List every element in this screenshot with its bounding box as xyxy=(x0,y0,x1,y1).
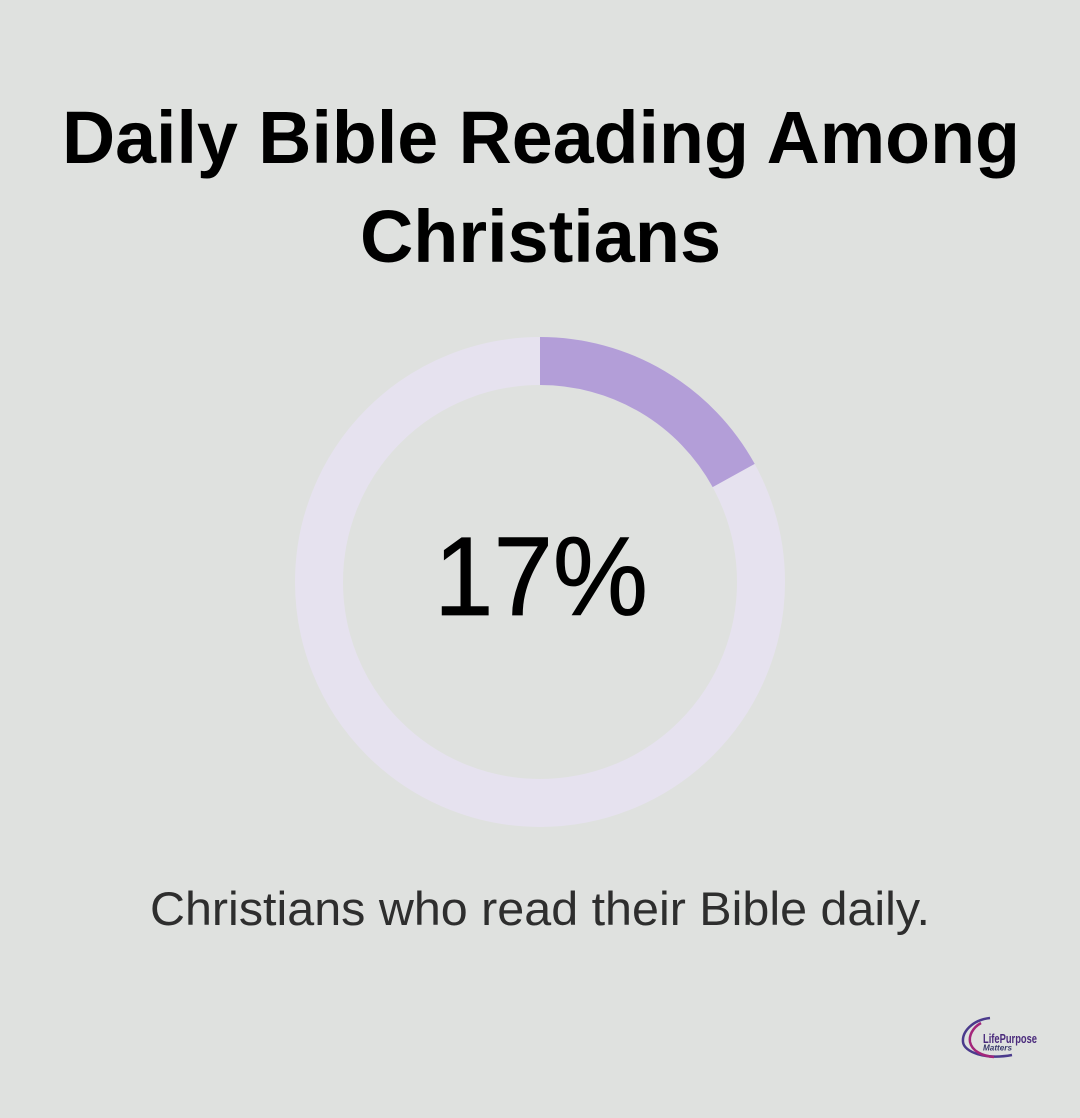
logo inner arc xyxy=(970,1023,994,1057)
donut chart: 17% xyxy=(319,361,761,803)
big percentage: 17% xyxy=(434,514,648,639)
logo wordmark: LifePurpose xyxy=(983,1031,1037,1046)
caption: Christians who read their Bible daily. xyxy=(150,882,930,935)
donut track xyxy=(319,361,761,803)
donut value arc xyxy=(540,361,734,476)
title: Daily Bible Reading Among xyxy=(62,96,1020,179)
logo: Life Purpose Matters xyxy=(963,1018,1037,1057)
title: Christians xyxy=(360,195,721,278)
logo outer arc xyxy=(963,1018,1012,1057)
logo tagline: Matters xyxy=(983,1044,1013,1052)
title xyxy=(62,96,1020,278)
